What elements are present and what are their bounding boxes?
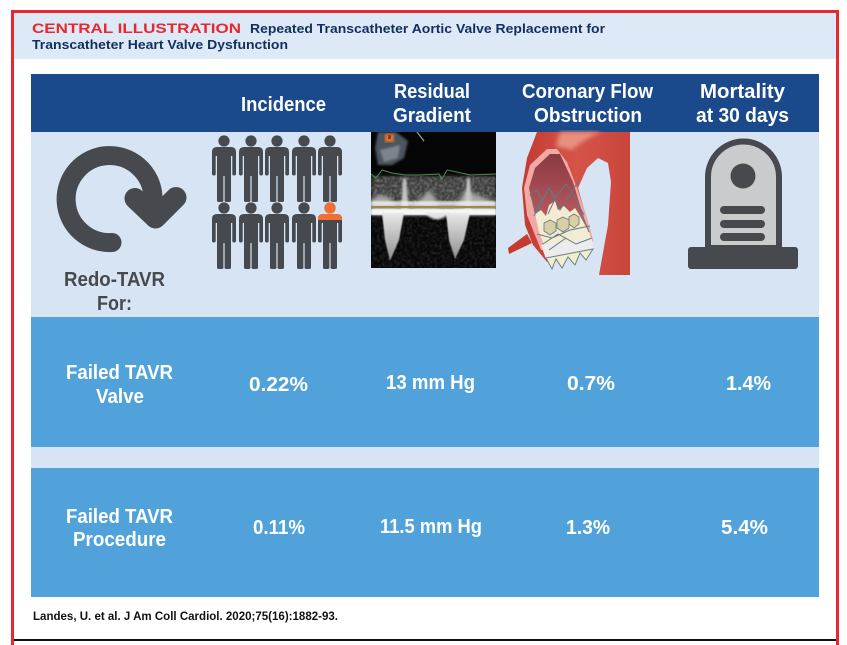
column heading: coronary flow obstruction: Coronary Flow [522, 81, 653, 103]
icon: redo arrow [66, 156, 176, 243]
column heading: residual gradient: Gradient [393, 105, 471, 127]
panel: column header bar [31, 74, 819, 132]
row label: failed TAVR procedure [66, 506, 174, 551]
column heading: residual gradient [393, 81, 471, 127]
panel: icon band [31, 132, 819, 317]
gradient value: 11.5 mm Hg [380, 516, 482, 538]
column heading: residual gradient: Residual [394, 81, 470, 103]
gradient value: 13 mm Hg [386, 372, 475, 394]
label: redo-TAVR for [64, 269, 166, 315]
row separator [31, 447, 819, 468]
row label: failed TAVR valve [66, 362, 174, 408]
panel: failed TAVR valve row [31, 317, 819, 447]
citation: Landes, U. et al. J Am Coll Cardiol. 2020;75(16):1882-93. [33, 611, 338, 623]
panel: failed TAVR procedure row [31, 468, 819, 597]
title line 1: Repeated Transcatheter Aortic Valve Replacement for [250, 21, 605, 36]
incidence value: 0.11% [253, 517, 305, 539]
column heading: incidence: Incidence [241, 94, 326, 116]
icon: ten people, one highlighted [212, 135, 342, 269]
row label: failed TAVR procedure: Procedure [73, 529, 166, 551]
mortality value: 1.4% [726, 373, 771, 395]
pink rim [524, 149, 593, 250]
coronary branch [508, 234, 532, 254]
label: redo-TAVR for: Redo-TAVR [64, 269, 166, 291]
icon: tombstone [688, 141, 798, 269]
mortality value: 5.4% [721, 517, 768, 539]
stent frame [530, 181, 593, 269]
row label: failed TAVR valve: Valve [96, 386, 144, 408]
column heading: mortality at 30 days: Mortality [700, 81, 786, 103]
coronary obstruction value: 0.7% [567, 373, 615, 395]
row label: failed TAVR procedure: Failed TAVR [66, 506, 174, 528]
heading: central illustration label: CENTRAL ILLUSTRATION [32, 20, 241, 36]
coronary obstruction value: 1.3% [566, 517, 610, 539]
incidence value: 0.22% [249, 374, 308, 396]
image: aortic arch with transcatheter valve [508, 132, 630, 275]
header band [13, 12, 837, 59]
column heading: coronary flow obstruction [522, 81, 653, 127]
label: redo-TAVR for: For: [97, 293, 132, 315]
column heading: mortality at 30 days: at 30 days [696, 105, 789, 127]
image: doppler echocardiogram [371, 132, 496, 268]
title line 2: Transcatheter Heart Valve Dysfunction [32, 37, 288, 52]
aorta [522, 132, 630, 275]
row label: failed TAVR valve: Failed TAVR [66, 362, 174, 384]
column heading: mortality at 30 days [696, 81, 789, 127]
column heading: coronary flow obstruction: Obstruction [534, 105, 642, 127]
interior [529, 154, 592, 248]
